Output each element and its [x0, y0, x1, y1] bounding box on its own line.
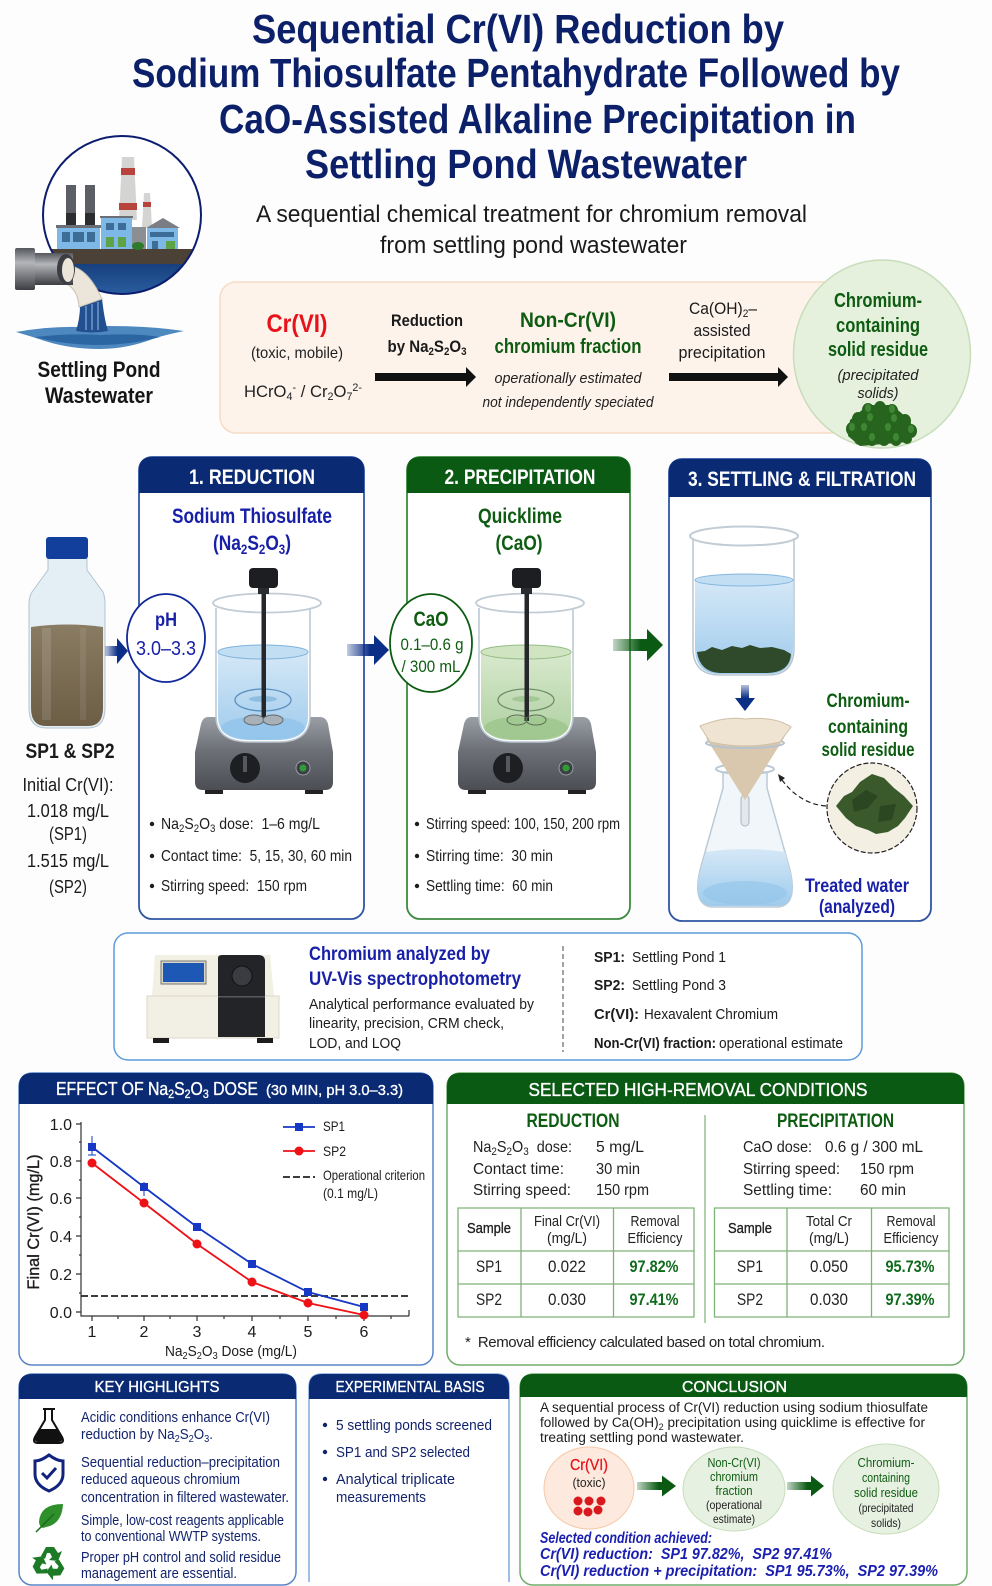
label: sample information: SP1 & SP2 — [26, 740, 114, 763]
reagent name: 2 — [241, 541, 248, 557]
reduction conditions: S — [497, 1139, 507, 1156]
chart heading — [56, 1079, 403, 1101]
axis labels — [24, 1117, 369, 1362]
achieved results: Cr(VI) reduction + precipitation: SP1 95.73%, SP2 97.39% — [540, 1563, 938, 1580]
achieved results — [540, 1530, 938, 1580]
highlight: pH control: Proper pH control and solid residue — [81, 1550, 281, 1566]
method description: linearity, precision, CRM check, — [309, 1015, 504, 1032]
basis list: 5 settling ponds screened — [336, 1417, 492, 1434]
abbreviations legend: operational estimate — [719, 1035, 843, 1052]
reduction conditions — [473, 1111, 649, 1199]
precipitation label: Ca(OH) — [689, 299, 748, 318]
conclusion text: precipitation using quicklime is effective for — [664, 1415, 926, 1430]
flow node: Cr(VI): Cr(VI) — [570, 1457, 608, 1474]
axis labels: 0.0 — [50, 1305, 72, 1322]
Non-Cr(VI) fraction — [482, 309, 654, 411]
reduction label: Reduction — [391, 311, 463, 330]
achieved results: Selected condition achieved: — [540, 1530, 712, 1547]
axis labels: 6 — [360, 1324, 369, 1341]
icon: flask — [34, 1409, 63, 1443]
table: precipitation results: 97.39% — [886, 1290, 934, 1309]
highlight: acidic conditions: 3 — [204, 1434, 210, 1445]
reagent name: ) — [285, 532, 291, 555]
method description: Analytical performance evaluated by — [309, 996, 534, 1013]
abbreviations legend — [594, 949, 843, 1052]
Cr(VI) species: 2- — [352, 382, 362, 394]
callout: CaO dose — [390, 594, 472, 692]
icon: factory and discharge pipe — [15, 136, 210, 349]
panel: 2. precipitation — [407, 457, 630, 919]
conclusion text: A sequential process of Cr(VI) reduction using sodium thiosulfate — [540, 1400, 928, 1415]
chart legend: SP1 — [323, 1118, 345, 1134]
reduction label: 2 — [428, 346, 434, 358]
callout: pH range: 3.0–3.3 — [136, 638, 196, 660]
label: residue: solid residue — [822, 740, 914, 761]
highlight: sequential process: concentration in filtered wastewater. — [81, 1490, 289, 1506]
axis labels: 3 — [193, 1324, 202, 1341]
precipitation conditions: 60 min — [860, 1182, 906, 1199]
highlight: acidic conditions: O — [194, 1427, 204, 1443]
reagent name: Quicklime — [478, 505, 562, 528]
precipitation conditions: CaO dose: — [743, 1139, 812, 1156]
heading: KEY HIGHLIGHTS — [94, 1379, 220, 1396]
label: sample information: 1.515 mg/L — [27, 851, 109, 871]
table: precipitation results: 0.050 — [810, 1257, 848, 1276]
panel: conclusion — [520, 1374, 967, 1585]
flow node: solid residue: Chromium- — [858, 1455, 914, 1470]
reagent name: S — [247, 532, 259, 555]
solid residue circle — [794, 260, 970, 448]
reduction label — [388, 311, 466, 358]
chart axes — [76, 1122, 409, 1321]
precipitation label: assisted — [694, 321, 750, 340]
table: reduction results: Sample — [467, 1221, 511, 1237]
highlight: reagents — [81, 1513, 284, 1545]
chart heading: O — [191, 1079, 203, 1099]
icon: stirred beaker on hot plate — [458, 568, 596, 794]
arrow: residue to filter — [778, 774, 826, 806]
reduction conditions: 5 mg/L — [596, 1139, 644, 1156]
panel: analysis method — [114, 933, 862, 1060]
label: residue: Chromium- — [826, 691, 910, 712]
table: reduction results: (mg/L) — [547, 1231, 587, 1247]
precipitation label: 2 — [743, 308, 748, 320]
axis labels: 1 — [88, 1324, 97, 1341]
basis list: Analytical triplicate — [336, 1471, 455, 1488]
axis labels: Dose (mg/L) — [218, 1343, 297, 1360]
achieved results: Cr(VI) reduction: SP1 97.82%, SP2 97.41% — [540, 1546, 832, 1563]
arrow: beaker to filter — [735, 685, 755, 711]
chart legend: SP2 — [323, 1143, 346, 1159]
reagent name: 2 — [259, 541, 265, 557]
precipitation conditions: Settling time: — [743, 1182, 832, 1199]
reduction conditions: Na — [473, 1139, 493, 1156]
highlight: acidic conditions: 2 — [175, 1434, 180, 1445]
axis labels: 3 — [213, 1351, 218, 1362]
highlight: acidic conditions: . — [209, 1427, 213, 1443]
Cr(VI) species: 2 — [328, 391, 333, 403]
label: treated water: (analyzed) — [819, 897, 895, 918]
process conditions: Contact time: 5, 15, 30, 60 min — [161, 848, 352, 865]
panel: 3. settling and filtration — [669, 459, 931, 921]
axis labels: 4 — [248, 1324, 257, 1341]
series: SP1 — [88, 1136, 368, 1311]
reduction label: 2 — [444, 346, 449, 358]
reduction conditions: Contact time: — [473, 1161, 564, 1178]
table: reduction results: Efficiency — [628, 1231, 683, 1247]
flow node: solid residue: solid residue — [854, 1485, 918, 1500]
reagent name: O — [265, 532, 279, 555]
highlight: acidic conditions: S — [180, 1427, 189, 1443]
table: precipitation results: 0.030 — [810, 1290, 848, 1309]
abbreviations legend: Non-Cr(VI) fraction: — [594, 1035, 716, 1052]
precipitation conditions: 0.6 g / 300 mL — [825, 1139, 923, 1156]
icon: stirred beaker on hot plate — [195, 568, 333, 794]
panel: 1. reduction — [139, 457, 364, 919]
header: 1. REDUCTION — [189, 466, 315, 489]
reduction label: O — [449, 337, 461, 356]
basis list: measurements — [336, 1489, 426, 1506]
reduction conditions: dose: — [529, 1139, 572, 1156]
precipitation label: precipitation — [678, 343, 766, 362]
process conditions: Stirring speed: 100, 150, 200 rpm — [426, 816, 620, 833]
label: residue — [822, 691, 914, 761]
process conditions: O — [199, 816, 210, 833]
process conditions: Na — [161, 816, 181, 833]
highlight: acidic conditions — [81, 1410, 270, 1445]
abbreviations legend: Settling Pond 3 — [632, 977, 726, 994]
flow node: solid residue: (precipitated — [858, 1501, 914, 1515]
reagent name — [478, 505, 562, 555]
highlight: acidic conditions: reduction by Na — [81, 1427, 183, 1443]
Cr(VI) species: 4 — [287, 391, 292, 403]
flow node: non-Cr(VI): Non-Cr(VI) — [708, 1455, 760, 1470]
precipitation conditions: Stirring speed: — [743, 1161, 840, 1178]
table: reduction results: SP2 — [476, 1290, 502, 1309]
Non-Cr(VI) fraction: chromium fraction — [494, 336, 642, 358]
icon: solid residue close-up — [827, 763, 917, 853]
abbreviations legend: SP2: — [594, 977, 625, 994]
reduction label: 3 — [461, 346, 466, 358]
footnote: * Removal efficiency calculated based on total chromium. — [465, 1334, 825, 1351]
solid residue circle: containing — [836, 315, 920, 337]
label: settling pond wastewater: Settling Pond — [38, 357, 160, 382]
axis labels: Na — [165, 1343, 184, 1360]
flow node: non-Cr(VI) — [683, 1447, 785, 1531]
reduction conditions: 2 — [507, 1146, 512, 1158]
table: precipitation results: 95.73% — [886, 1257, 934, 1276]
flow node: Cr(VI) — [544, 1447, 634, 1529]
Cr(VI) species — [244, 310, 362, 403]
table: precipitation results: SP1 — [737, 1257, 763, 1276]
axis labels: 0.4 — [50, 1229, 72, 1246]
label: treated water: Treated water — [805, 876, 910, 897]
table: precipitation results: Total Cr — [806, 1214, 852, 1230]
highlight: pH control — [81, 1550, 281, 1582]
chart heading: 2 — [168, 1087, 174, 1101]
label: settling pond wastewater — [38, 357, 160, 408]
chart legend: (0.1 mg/L) — [323, 1185, 378, 1201]
Cr(VI) species: Cr(VI) — [266, 310, 328, 338]
label: sample information: 1.018 mg/L — [27, 801, 109, 821]
flow node: solid residue: solids) — [871, 1516, 901, 1530]
table: reduction results: 0.030 — [548, 1290, 586, 1309]
precipitation conditions — [743, 1111, 923, 1199]
axis labels: Final Cr(VI) (mg/L) — [24, 1154, 43, 1290]
Cr(VI) species: 7 — [346, 391, 352, 403]
label: sample information: Initial Cr(VI): — [22, 775, 114, 795]
callout: CaO dose: / 300 mL — [402, 657, 460, 676]
conclusion text: followed by Ca(OH) — [540, 1415, 658, 1430]
abbreviations legend: Cr(VI): — [594, 1006, 639, 1023]
label: residue: containing — [828, 717, 908, 738]
panel: selected high-removal conditions — [447, 1073, 964, 1365]
reagent name: (CaO) — [496, 532, 542, 555]
reduction conditions: 3 — [523, 1146, 529, 1158]
flow node: Cr(VI): (toxic) — [572, 1475, 606, 1490]
callout: pH range: pH — [155, 610, 177, 631]
subtitle: A sequential chemical treatment for chromium removal — [256, 201, 807, 228]
method description — [309, 944, 534, 1052]
precipitation conditions: 150 rpm — [860, 1161, 914, 1178]
callout: CaO dose: 0.1–0.6 g — [400, 635, 464, 654]
solid residue circle: solids) — [858, 385, 898, 402]
chart legend — [283, 1118, 425, 1201]
reagent name: (Na — [213, 532, 247, 555]
highlight: acidic conditions: 2 — [189, 1434, 194, 1445]
Non-Cr(VI) fraction: not independently speciated — [482, 394, 654, 411]
icon: shield — [35, 1455, 63, 1491]
header: 2. PRECIPITATION — [444, 466, 596, 489]
label: sample information — [22, 740, 114, 897]
reduction conditions: 30 min — [596, 1161, 640, 1178]
panel: dose effect chart — [19, 1073, 433, 1365]
title: CaO-Assisted Alkaline Precipitation in — [219, 96, 856, 142]
reduction conditions: REDUCTION — [526, 1111, 620, 1132]
icon: leaf — [36, 1504, 63, 1532]
Non-Cr(VI) fraction: Non-Cr(VI) — [520, 309, 616, 332]
table: precipitation results: SP2 — [737, 1290, 763, 1309]
table: precipitation results — [714, 1208, 949, 1317]
arrow: precipitation — [669, 367, 788, 387]
solid residue circle: solid residue — [828, 339, 928, 361]
table: reduction results: 97.82% — [630, 1257, 678, 1276]
process conditions: Stirring speed: 150 rpm — [161, 878, 307, 895]
method description: UV-Vis spectrophotometry — [309, 969, 521, 990]
icon: settling beaker — [690, 526, 798, 675]
label: settling pond wastewater: Wastewater — [45, 383, 153, 408]
reagent name — [172, 505, 332, 557]
table: reduction results — [458, 1208, 694, 1317]
process conditions: 2 — [179, 823, 184, 835]
axis labels: 2 — [183, 1351, 188, 1362]
process conditions: dose: 1–6 mg/L — [215, 816, 320, 833]
title: Settling Pond Wastewater — [305, 141, 747, 187]
process conditions — [415, 816, 620, 895]
icon: sample bottle — [29, 537, 105, 728]
highlight: reagents: Simple, low-cost reagents applicable — [81, 1513, 284, 1529]
abbreviations legend: Hexavalent Chromium — [644, 1006, 778, 1023]
process conditions: S — [184, 816, 194, 833]
table: reduction results: Removal — [630, 1214, 680, 1230]
reduction label: by Na — [388, 337, 434, 356]
panel: experimental basis — [309, 1374, 509, 1582]
arrow: sample to reduction — [105, 638, 128, 664]
table: reduction results: Final Cr(VI) — [534, 1214, 600, 1230]
Non-Cr(VI) fraction: operationally estimated — [494, 370, 642, 387]
conclusion text — [540, 1400, 928, 1445]
Cr(VI) species: - — [292, 382, 296, 394]
label: sample information: (SP2) — [49, 877, 87, 897]
callout: pH range — [127, 594, 205, 682]
highlight: acidic conditions: Acidic conditions enhance Cr(VI) — [81, 1410, 270, 1426]
axis labels: 5 — [304, 1324, 313, 1341]
heading: SELECTED HIGH-REMOVAL CONDITIONS — [528, 1080, 868, 1100]
table: precipitation results: Efficiency — [884, 1231, 939, 1247]
reduction conditions: Stirring speed: — [473, 1182, 571, 1199]
axis labels: 2 — [140, 1324, 149, 1341]
highlight: sequential process — [81, 1455, 289, 1506]
series: SP2 — [88, 1158, 368, 1320]
table: reduction results: SP1 — [476, 1257, 502, 1276]
axis labels: 1.0 — [50, 1117, 72, 1134]
highlight: pH control: management are essential. — [81, 1566, 237, 1582]
reagent name: Sodium Thiosulfate — [172, 505, 332, 528]
subtitle — [256, 201, 807, 259]
Cr(VI) species: HCrO — [244, 382, 287, 401]
axis labels: O — [202, 1343, 213, 1360]
heading: CONCLUSION — [682, 1379, 787, 1396]
precipitation conditions: PRECIPITATION — [777, 1111, 894, 1132]
icon: filter funnel and flask — [698, 718, 792, 907]
reduction label: S — [434, 337, 444, 356]
table: precipitation results: Removal — [886, 1214, 936, 1230]
reagent name: 3 — [279, 541, 285, 557]
arrow: precipitation to settling — [613, 629, 663, 661]
subtitle: from settling pond wastewater — [380, 232, 687, 259]
flow node: non-Cr(VI): chromium — [710, 1469, 758, 1484]
basis list — [323, 1417, 492, 1506]
axis labels: 2 — [197, 1351, 202, 1362]
chart legend: Operational criterion — [323, 1167, 425, 1183]
flow node: non-Cr(VI): fraction — [716, 1483, 752, 1498]
table: reduction results: 0.022 — [548, 1257, 586, 1276]
arrow: reduction — [375, 367, 476, 387]
axis labels: 0.2 — [50, 1267, 72, 1284]
axis labels: 0.8 — [50, 1154, 72, 1171]
chart heading: 3 — [203, 1087, 209, 1101]
title — [132, 6, 900, 187]
solid residue circle: Chromium- — [834, 290, 922, 312]
title: Sequential Cr(VI) Reduction by — [252, 6, 784, 52]
process conditions: 2 — [194, 823, 199, 835]
arrow: to non-Cr(VI) — [637, 1476, 676, 1496]
chart heading: DOSE — [209, 1079, 258, 1099]
label: treated water — [805, 876, 910, 918]
header: 3. SETTLING & FILTRATION — [688, 468, 916, 491]
icon: recycle — [29, 1547, 67, 1582]
flow node: solid residue: containing — [862, 1470, 910, 1485]
label: sample information: (SP1) — [49, 824, 87, 844]
abbreviations legend: Settling Pond 1 — [632, 949, 726, 966]
chart heading: S — [174, 1079, 185, 1099]
process conditions: Settling time: 60 min — [426, 878, 553, 895]
Cr(VI) species: / Cr — [296, 382, 328, 401]
precipitation label: – — [748, 299, 757, 318]
abbreviations legend: SP1: — [594, 949, 625, 966]
flow node: non-Cr(VI): (operational — [706, 1498, 762, 1512]
table: precipitation results: Sample — [728, 1221, 772, 1237]
flow node: non-Cr(VI): estimate) — [713, 1512, 755, 1526]
highlight: sequential process: Sequential reduction–precipitation — [81, 1455, 280, 1471]
highlight: reagents: to conventional WWTP systems. — [81, 1529, 261, 1545]
callout: CaO dose: CaO — [414, 608, 448, 631]
heading: EXPERIMENTAL BASIS — [336, 1379, 484, 1396]
axis labels: 0.6 — [50, 1191, 72, 1208]
method description: LOD, and LOQ — [309, 1035, 401, 1052]
process conditions — [150, 816, 352, 895]
chart heading: EFFECT OF Na — [56, 1079, 184, 1099]
Cr(VI) species: O — [333, 382, 346, 401]
panel: chemical pathway — [220, 260, 970, 448]
method description: Chromium analyzed by — [309, 944, 490, 965]
chart heading: 2 — [185, 1087, 191, 1101]
process conditions: 3 — [210, 823, 215, 835]
process conditions: Stirring time: 30 min — [426, 848, 553, 865]
chart heading: (30 MIN, pH 3.0–3.3) — [266, 1082, 403, 1099]
table: precipitation results: (mg/L) — [809, 1231, 849, 1247]
axis labels: S — [188, 1343, 197, 1360]
Cr(VI) species: (toxic, mobile) — [251, 345, 343, 362]
panel: key highlights — [19, 1374, 296, 1585]
reduction conditions: O — [512, 1139, 523, 1156]
icon: UV-Vis spectrophotometer — [147, 955, 279, 1043]
reduction conditions: 2 — [491, 1146, 497, 1158]
arrow: to solid residue — [787, 1476, 824, 1496]
conclusion text: 2 — [659, 1422, 664, 1432]
precipitation label — [678, 299, 766, 362]
basis list: SP1 and SP2 selected — [336, 1444, 470, 1461]
conclusion text: treating settling pond wastewater. — [540, 1430, 744, 1445]
flow node: solid residue — [833, 1444, 939, 1534]
highlight: sequential process: reduced aqueous chromium — [81, 1472, 240, 1488]
arrow: reduction to precipitation — [347, 635, 389, 665]
table: reduction results: 97.41% — [630, 1290, 678, 1309]
solid residue circle: (precipitated — [838, 367, 919, 384]
reduction conditions: 150 rpm — [596, 1182, 649, 1199]
